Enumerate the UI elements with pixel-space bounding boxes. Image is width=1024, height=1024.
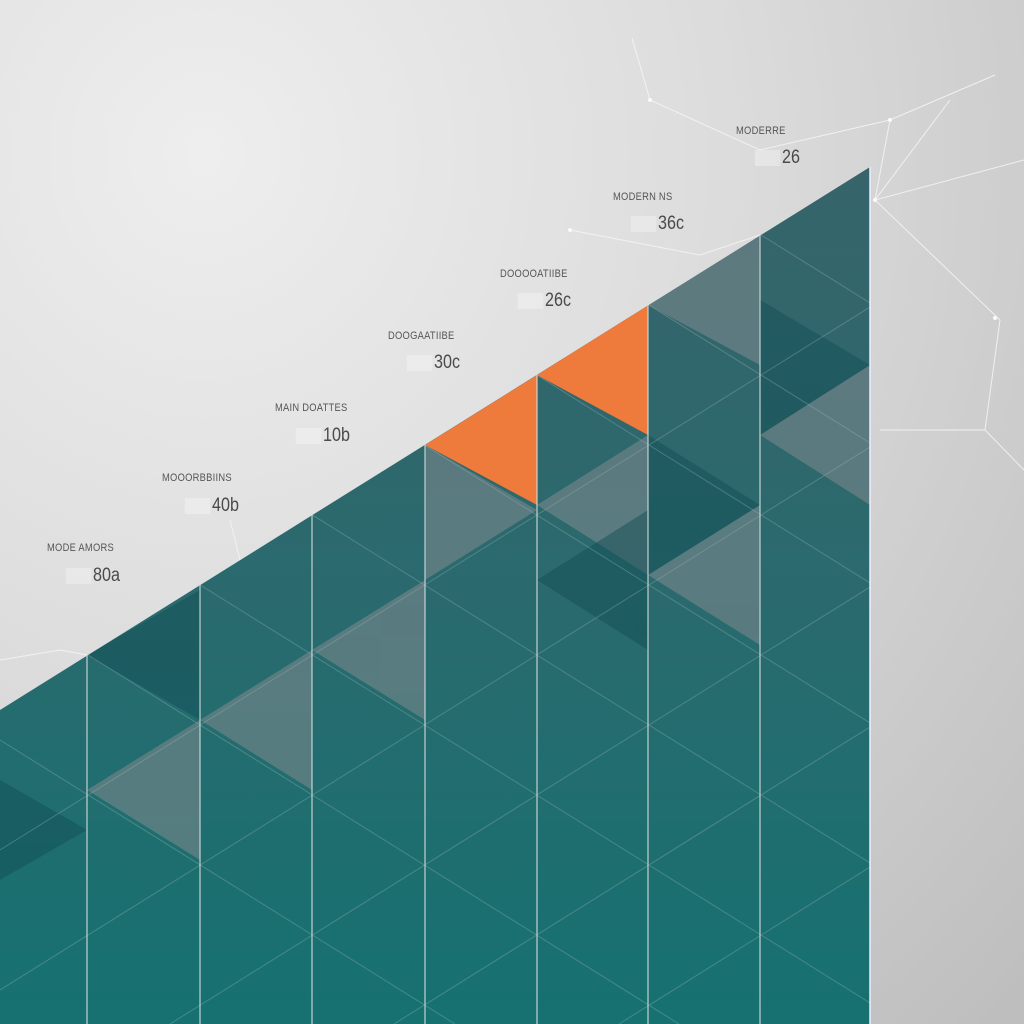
- label 2: MOOORBBIINS: [162, 472, 232, 484]
- label 3: [275, 402, 350, 446]
- label 1: [47, 542, 120, 586]
- label 2: 40b: [212, 495, 239, 516]
- label 3: 10b: [323, 425, 350, 446]
- label 6: 36c: [658, 213, 684, 234]
- label 5: 26c: [545, 290, 571, 311]
- label 6: MODERN NS: [613, 191, 672, 203]
- orange triangles: [425, 375, 537, 505]
- label 4: 30c: [434, 352, 460, 373]
- label 4: [388, 330, 460, 373]
- label 3: MAIN DOATTES: [275, 402, 348, 414]
- label 1: MODE AMORS: [47, 542, 114, 554]
- label 2: [162, 472, 239, 516]
- label 7: [736, 125, 800, 168]
- label 7: 26: [782, 147, 800, 168]
- label 6: [613, 191, 684, 234]
- label 4: DOOGAATIIBE: [388, 330, 455, 342]
- label 5: DOOOOATIIBE: [500, 268, 568, 280]
- label 1: 80a: [93, 565, 120, 586]
- chart: staircase triangle bars: [0, 167, 871, 1024]
- label 5: [500, 268, 571, 311]
- label 7: MODERRE: [736, 125, 786, 137]
